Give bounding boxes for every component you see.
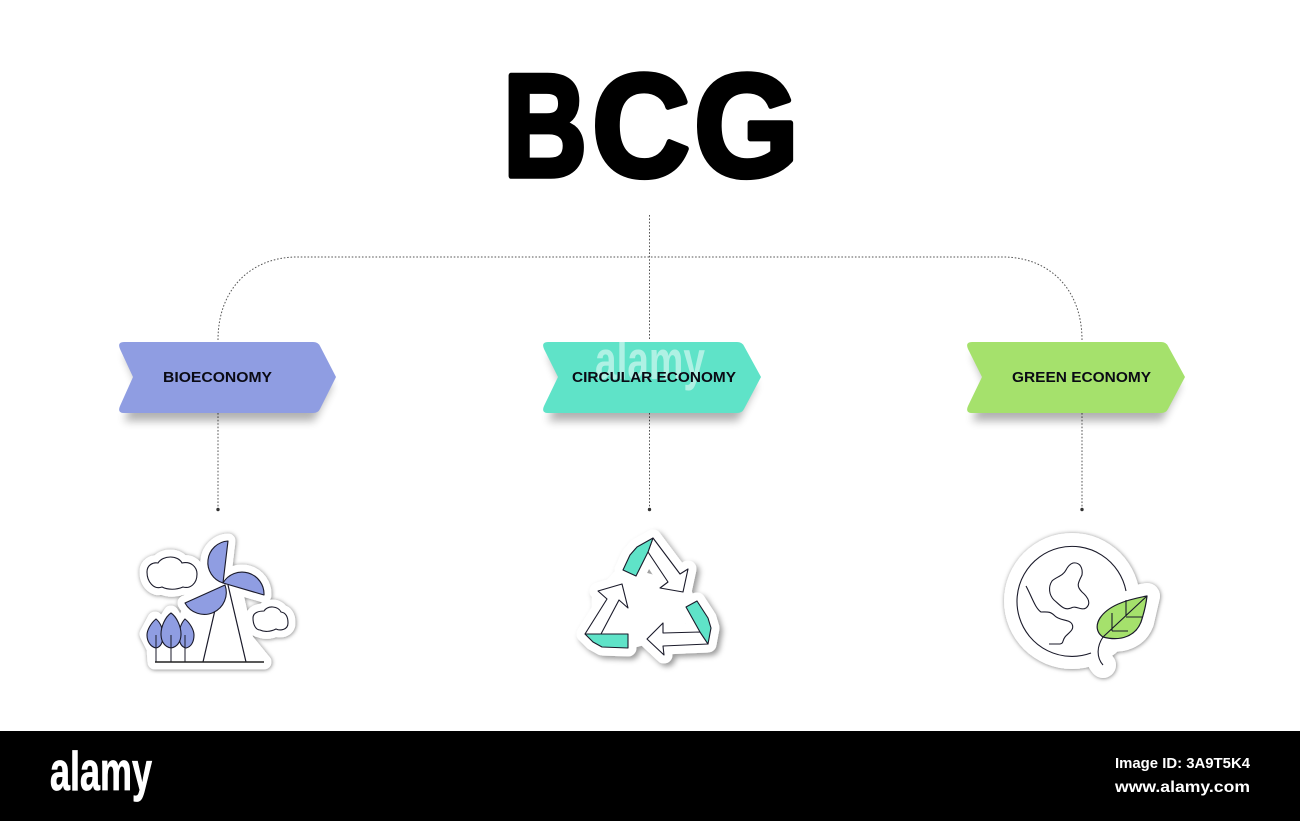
website: www.alamy.com	[1114, 779, 1250, 796]
tree trunks and ground	[156, 635, 185, 662]
top arrow teal tail	[623, 538, 653, 576]
turbine tower	[203, 585, 246, 662]
sticker base: turbine	[147, 541, 288, 662]
cloud left	[147, 557, 197, 589]
right arrow	[647, 623, 708, 655]
continent lower	[1026, 586, 1073, 644]
trees	[147, 613, 194, 648]
title: C	[592, 44, 690, 207]
label: circular economy: CIRCULAR ECONOMY	[572, 370, 736, 386]
watermark: alamy	[595, 329, 705, 391]
banner: green economy	[967, 342, 1185, 421]
turbine blades	[185, 541, 264, 614]
banner: circular economy	[543, 329, 761, 421]
title: G	[694, 44, 799, 207]
title: B	[503, 44, 587, 207]
title	[503, 44, 799, 207]
right arrow teal tail	[686, 601, 711, 644]
label: green economy: GREEN ECONOMY	[1012, 370, 1151, 386]
footer bar	[0, 731, 1300, 821]
leaf veins and stem	[1098, 596, 1147, 665]
leaf	[1097, 596, 1147, 639]
continent upper	[1050, 563, 1089, 609]
banner: bioeconomy	[119, 342, 336, 421]
sticker base: recycling	[585, 538, 711, 655]
icon: wind turbine with trees and clouds	[147, 541, 288, 662]
connector end dots	[216, 508, 1084, 511]
icon: globe with leaf	[1004, 533, 1147, 669]
left arrow teal tail	[585, 634, 628, 648]
left arrow	[585, 584, 628, 634]
footer logo: alamy	[50, 740, 152, 802]
sticker base: globe	[1004, 533, 1147, 669]
connector lines	[218, 215, 1082, 509]
top arrow	[648, 538, 688, 592]
icon: recycling arrows	[585, 538, 711, 655]
globe outline	[1017, 546, 1126, 656]
cloud right	[253, 607, 288, 631]
image id: Image ID: 3A9T5K4	[1115, 755, 1251, 772]
label: bioeconomy: BIOECONOMY	[163, 370, 272, 386]
